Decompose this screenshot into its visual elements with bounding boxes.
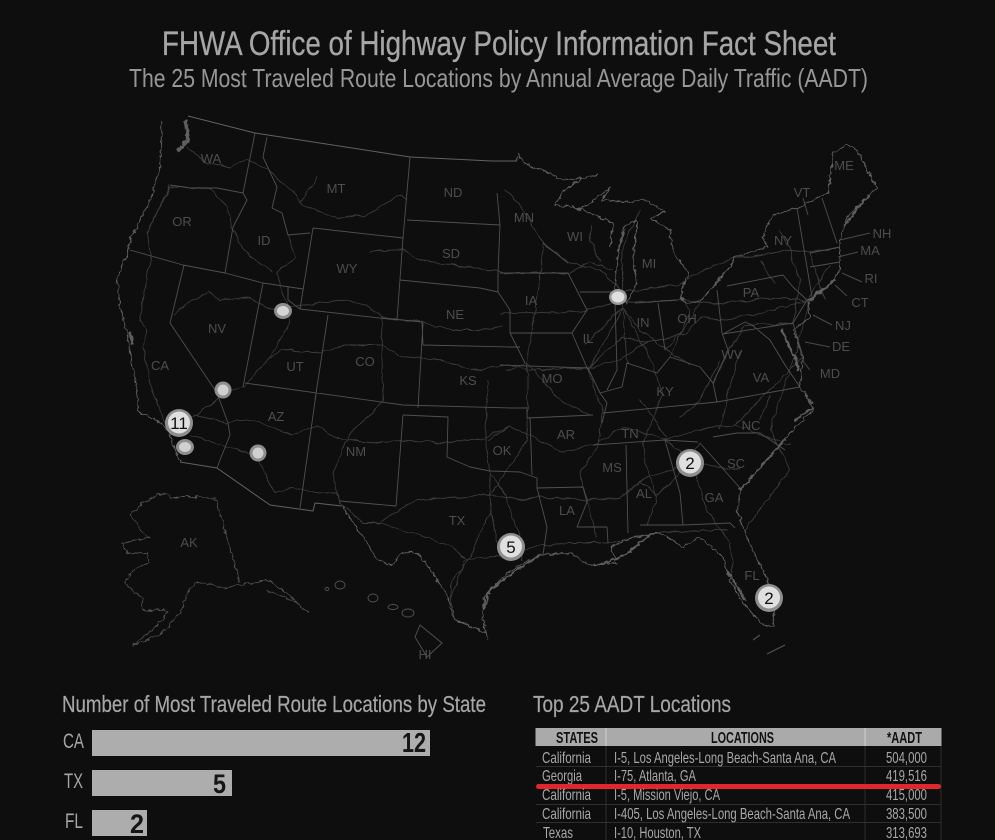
state labels: MS <box>602 460 622 475</box>
bar chart <box>63 727 430 839</box>
state labels: ME <box>834 158 854 173</box>
state labels: MO <box>542 371 562 386</box>
bar: FL: 2 <box>130 809 144 839</box>
red highlight line <box>536 784 941 789</box>
state labels: AR <box>557 427 575 442</box>
state labels: RI <box>864 271 878 286</box>
state labels: TX <box>449 513 466 528</box>
marker: Chicago location <box>609 289 627 305</box>
state labels: HI <box>418 647 432 662</box>
state labels: AL <box>636 486 652 501</box>
state labels: VA <box>753 370 770 385</box>
state labels: TN <box>621 426 639 441</box>
marker: Atlanta 2: 2 <box>685 454 695 473</box>
state labels: NE <box>446 307 464 322</box>
state labels <box>151 151 891 662</box>
bar chart heading: Number of Most Traveled Route Locations by State <box>62 691 486 717</box>
table header: STATES <box>556 730 598 747</box>
state labels: LA <box>559 503 575 518</box>
bar: CA: CA <box>63 730 84 753</box>
row: California I-5 Los Angeles: 504,000 <box>886 750 927 767</box>
state labels: MN <box>514 210 534 225</box>
state labels: AZ <box>268 409 284 424</box>
marker: Miami 2 <box>755 584 783 612</box>
state labels: OK <box>493 443 512 458</box>
table heading: Top 25 AADT Locations <box>533 691 731 717</box>
state labels: UT <box>286 359 304 374</box>
state labels: NM <box>346 444 366 459</box>
Florida Keys <box>753 635 785 654</box>
state labels: MD <box>820 366 840 381</box>
state labels: WV <box>722 347 743 362</box>
state labels: MT <box>327 181 345 196</box>
row: Georgia I-75 Atlanta: I-75, Atlanta, GA <box>614 768 696 785</box>
bar: TX: 5 <box>213 769 226 799</box>
state labels: ID <box>258 233 270 248</box>
state labels: ND <box>444 185 462 200</box>
state labels: MI <box>642 256 656 271</box>
state labels: NC <box>742 418 760 433</box>
row: Georgia I-75 Atlanta <box>542 768 927 785</box>
state labels: WI <box>567 229 583 244</box>
state labels: OR <box>172 214 192 229</box>
title: FHWA Office of Highway Policy Information Fact Sheet <box>162 25 836 63</box>
marker: Miami 2: 2 <box>764 589 774 608</box>
state labels: FL <box>744 568 760 583</box>
state labels: IA <box>525 293 537 308</box>
state labels: MA <box>860 243 880 258</box>
state labels: OH <box>677 311 697 326</box>
table header: *AADT <box>887 730 922 747</box>
marker: Phoenix location <box>250 444 266 462</box>
highway network <box>140 147 840 620</box>
state labels: CA <box>151 358 169 373</box>
table header <box>536 728 942 747</box>
state labels: AK <box>180 535 198 550</box>
detailed coast shading <box>130 122 868 610</box>
bar: FL: FL <box>65 810 83 833</box>
row: Georgia I-75 Atlanta: 419,516 <box>886 768 927 785</box>
state labels: KS <box>459 373 477 388</box>
row: California I-5 Mission Viejo <box>542 787 927 804</box>
marker: Nevada location <box>214 382 232 398</box>
northern and Mexican border <box>180 116 517 511</box>
row: California I-405: California <box>542 806 591 823</box>
row: California I-405: I-405, Los Angeles-Long Beach-Santa Ana, CA <box>614 806 850 823</box>
state labels: NJ <box>835 318 851 333</box>
table header: LOCATIONS <box>711 730 774 747</box>
bar: CA: 12 <box>402 727 426 758</box>
Alaska outline <box>122 493 308 645</box>
state labels: WY <box>337 261 358 276</box>
bar: FL <box>65 809 147 839</box>
state labels: CO <box>355 354 375 369</box>
row: California I-5 Mission Viejo: I-5, Mission Viejo, CA <box>614 787 720 804</box>
state labels: SD <box>442 246 460 261</box>
row: California I-5 Mission Viejo: 415,000 <box>886 787 927 804</box>
state labels: VT <box>794 185 810 200</box>
marker: Houston 5 <box>497 533 525 561</box>
state labels: PA <box>743 285 760 300</box>
row: Georgia I-75 Atlanta: Georgia <box>542 768 582 785</box>
row: California I-5 Los Angeles: California <box>542 750 591 767</box>
marker: Los Angeles 11: 11 <box>170 414 188 433</box>
state labels: NY <box>774 233 792 248</box>
map of the United States <box>117 116 891 662</box>
bar: CA <box>63 727 430 758</box>
state labels: NH <box>873 226 891 241</box>
state labels: GA <box>705 490 724 505</box>
state labels: CT <box>851 295 869 310</box>
Hawaii outline <box>325 581 442 657</box>
state labels: SC <box>727 456 745 471</box>
state labels: KY <box>656 384 674 399</box>
state labels: IL <box>583 331 593 346</box>
state labels: IN <box>636 315 650 330</box>
marker: San Diego location <box>176 439 194 455</box>
marker: Los Angeles 11 <box>165 409 193 437</box>
bar: TX <box>64 769 232 799</box>
row: California I-5 Los Angeles: I-5, Los Angeles-Long Beach-Santa Ana, CA <box>614 750 836 767</box>
row: California I-5 Mission Viejo: California <box>542 787 591 804</box>
coastlines and national border <box>117 122 877 640</box>
state labels: NV <box>208 321 226 336</box>
marker: Houston 5: 5 <box>506 538 516 557</box>
state borders <box>130 133 840 555</box>
marker: Utah location <box>274 303 292 319</box>
row: Texas I-10 Houston <box>543 825 927 840</box>
marker: Atlanta 2 <box>676 449 704 477</box>
row: California I-405: 383,500 <box>886 806 927 823</box>
table: top 25 AADT locations <box>536 728 942 840</box>
state leader lines <box>802 198 870 370</box>
state labels: DE <box>832 339 850 354</box>
state labels: WA <box>201 151 222 166</box>
bar: TX: TX <box>64 770 83 793</box>
